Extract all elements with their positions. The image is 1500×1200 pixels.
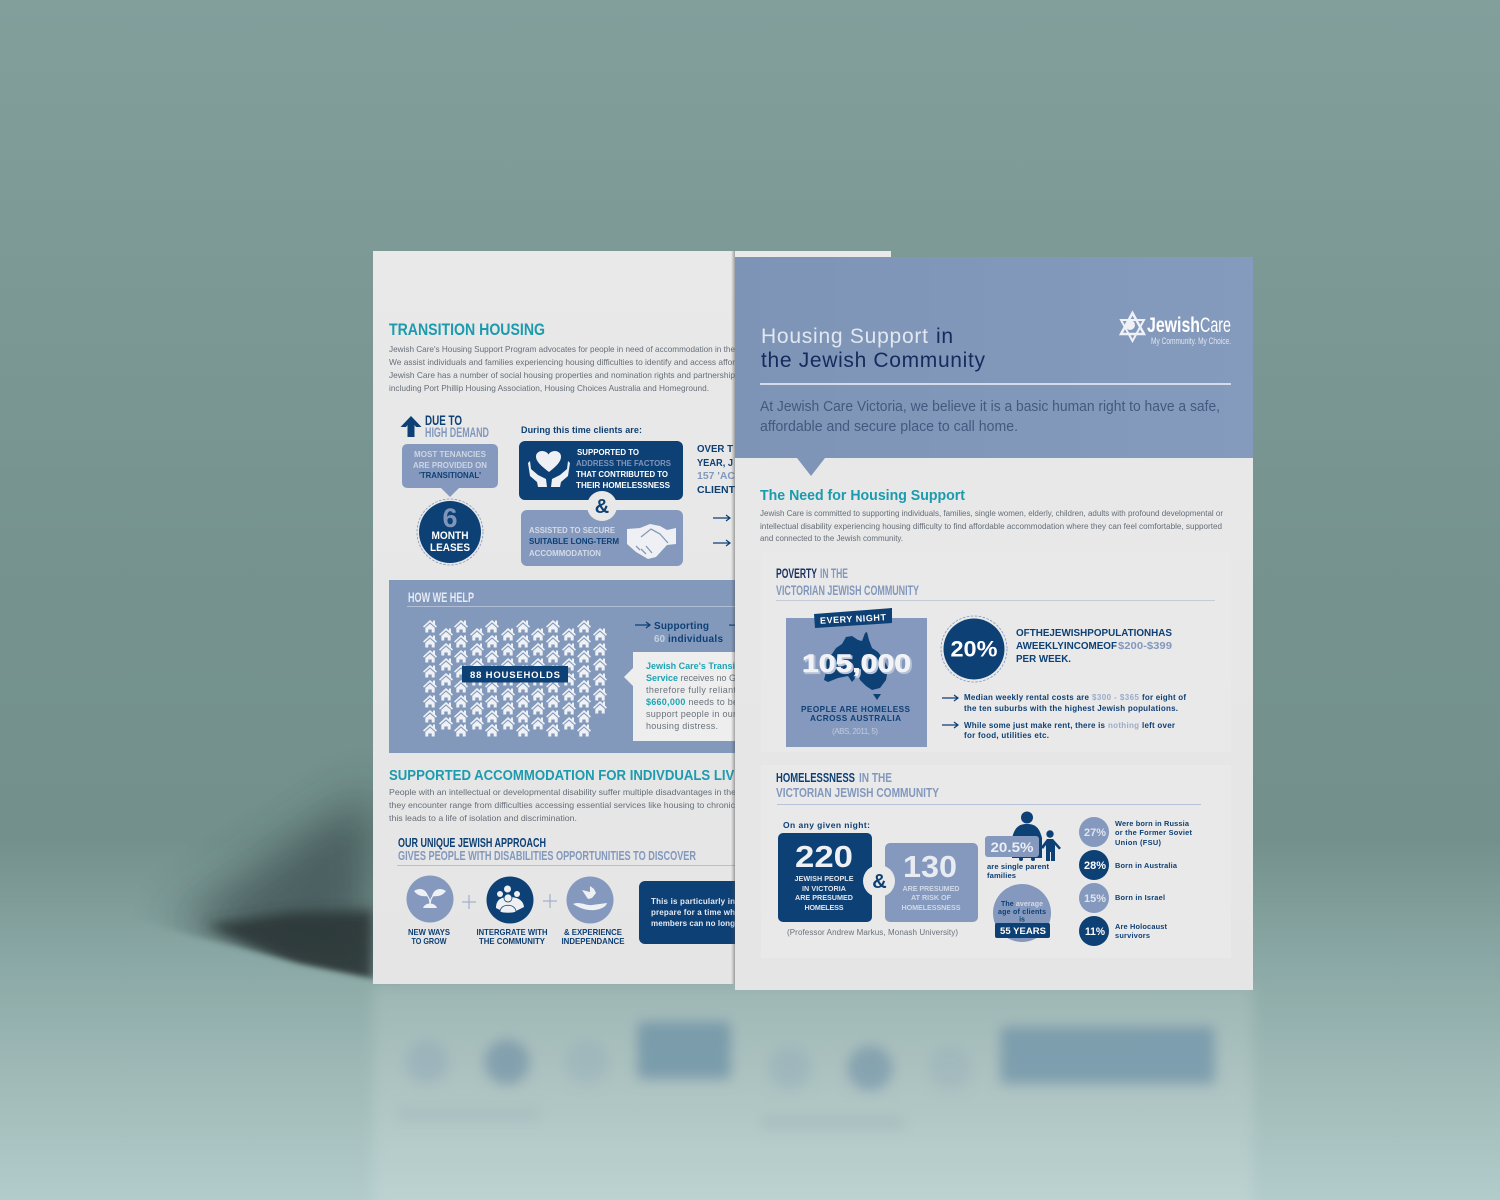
- text: rental costs: Median weekly rental costs are: [964, 693, 1090, 702]
- stat: 15% born in Israel: [1079, 883, 1165, 913]
- text: 20% income statement: [1016, 627, 1172, 665]
- label: 88 households: 88 HOUSEHOLDS: [470, 670, 560, 681]
- text: rental costs: While some just make rent, there is: [964, 721, 1106, 730]
- intro paragraph: [389, 344, 735, 393]
- panel: assisted to secure housing: [521, 510, 683, 566]
- text: over the year (cropped by front sheet): OVER T: [697, 443, 734, 455]
- sheet edge shade: [731, 251, 735, 984]
- stat: 20.5% single parents: families: [987, 871, 1016, 880]
- stat card: 105,000 homeless: [786, 608, 927, 747]
- logo: Jewish Care: Jewish: [1147, 314, 1200, 337]
- badge: 20%: [941, 616, 1007, 682]
- paragraph: need: Jewish Care is committed to supporting individuals, families, single women, elderly, children, adults with profound developmental or: [760, 509, 1223, 518]
- text: rental costs: left over: [1142, 721, 1175, 730]
- stat: 27% born in Russia: [1079, 817, 1193, 847]
- logo: Jewish Care: [1121, 313, 1231, 346]
- stat card: 220: ARE PRESUMED: [795, 893, 853, 902]
- stat: 27% born in Russia: Union (FSU): [1115, 838, 1162, 847]
- banner: every night: [814, 608, 892, 628]
- cast shadow behind the sheets: [170, 790, 373, 985]
- stat card: 130: ARE PRESUMED: [902, 884, 960, 893]
- panel: supported to address factors: SUPPORTED TO: [577, 447, 639, 457]
- heading: due to high demand: DUE TO: [425, 413, 462, 428]
- stat: 15% born in Israel: 15%: [1084, 893, 1106, 905]
- paragraph: need: intellectual disability experiencing housing difficulty to find affordable accommodation where they can feel comfortable, supported: [760, 522, 1222, 531]
- stat card: 220: HOMELESS: [804, 903, 844, 912]
- badge: 6 month leases: MONTH: [432, 530, 469, 542]
- text: rental costs: [964, 693, 1186, 740]
- title: Housing Support: [761, 325, 928, 348]
- badge: average age 55 years: 55 YEARS: [1000, 926, 1046, 937]
- arrows: poverty bullets: [942, 695, 958, 728]
- paragraph: disability disadvantage: [389, 787, 736, 823]
- text: over the year (cropped by front sheet): CLIENT: [697, 484, 736, 496]
- icon: people, integrate with the community: [486, 876, 534, 924]
- header pointer: [797, 458, 825, 476]
- stat: 28% born in Australia: Born in Australia: [1115, 861, 1178, 870]
- panel: assisted to secure housing: ACCOMMODATION: [529, 548, 601, 558]
- callout: particularly important: This is particularly in: [651, 897, 735, 906]
- stat: 11% Holocaust survivors: [1079, 916, 1168, 946]
- stat: 20.5% single parents: are single parent: [987, 862, 1049, 871]
- stat card: 130: AT RISK OF: [911, 893, 952, 902]
- arrows: [713, 515, 730, 546]
- stat card: 220: JEWISH PEOPLE: [794, 874, 854, 883]
- heading: homelessness: IN THE: [859, 770, 892, 785]
- labels: approach steps: & EXPERIENCE: [564, 927, 622, 937]
- heading: the need for housing support: The Need for Housing Support: [760, 487, 965, 504]
- text: 20% income statement: OFTHEJEWISHPOPULATIONHAS: [1016, 627, 1172, 639]
- callout: transition service: $660,000 needs to be: [646, 697, 738, 707]
- paragraph: disability disadvantage: People with an intellectual or developmental disability suffer multiple disadvantages in the: [389, 787, 736, 797]
- panel: supported to address factors: THEIR HOMELESSNESS: [576, 480, 670, 490]
- labels: approach steps: [408, 927, 625, 946]
- title: in: [936, 325, 953, 348]
- panel: supported to address factors: THAT CONTRIBUTED TO: [576, 469, 668, 479]
- logo star: [1121, 313, 1144, 341]
- stat card: 130: 130: [903, 849, 957, 884]
- text: 20% income statement: $200-$399: [1118, 640, 1172, 652]
- badge: 6 month leases: [417, 499, 483, 565]
- panel: assisted to secure housing: ASSISTED TO SECURE: [529, 525, 615, 535]
- callout: particularly important: [639, 881, 749, 944]
- text: over the year (cropped by front sheet): [697, 443, 736, 496]
- ampersand connector: &: [872, 871, 887, 893]
- panel: supported to address factors: [519, 441, 683, 500]
- stat card: 105,000 homeless: (ABS, 2011, 5): [832, 727, 878, 736]
- labels: approach steps: TO GROW: [412, 936, 447, 946]
- plus sign: [462, 895, 476, 909]
- intro paragraph: including Port Phillip Housing Association, Housing Choices Australia and Homeground.: [389, 383, 709, 393]
- callout: transition service: housing distress.: [646, 721, 718, 731]
- stat card: 105,000 homeless: ACROSS AUSTRALIA: [810, 714, 901, 723]
- icon: parent and child: [1012, 812, 1061, 861]
- intro paragraph: We assist individuals and families experiencing housing difficulties to identify and access affor: [389, 357, 735, 367]
- logo: Jewish Care: Care: [1200, 314, 1231, 337]
- heading: our unique jewish approach: [398, 836, 696, 863]
- callout: transition service: [624, 652, 739, 741]
- left sheet: transition housing: [373, 251, 891, 984]
- heading: transition housing: TRANSITION HOUSING: [389, 321, 545, 339]
- callout: transition service: Jewish Care's Transit: [646, 661, 738, 671]
- stat card: 105,000 homeless: PEOPLE ARE HOMELESS: [801, 705, 911, 714]
- panel: how we help: [389, 580, 739, 753]
- badge: average age 55 years: The average: [1001, 901, 1043, 908]
- panel: supported to address factors: ADDRESS THE FACTORS: [576, 458, 671, 468]
- heading: homelessness: VICTORIAN JEWISH COMMUNITY: [776, 785, 939, 800]
- callout: transition service: support people in our: [646, 709, 736, 719]
- badge: average age 55 years: is: [1019, 916, 1025, 924]
- text: rental costs: the ten suburbs with the highest Jewish populations.: [964, 704, 1178, 713]
- heading: our unique jewish approach: OUR UNIQUE JEWISH APPROACH: [398, 836, 546, 850]
- stat: 11% Holocaust survivors: Are Holocaust: [1115, 922, 1168, 931]
- labels: approach steps: NEW WAYS: [408, 927, 450, 937]
- stat: 28% born in Australia: [1079, 850, 1178, 880]
- header band: [735, 257, 1253, 458]
- intro statement: At Jewish Care Victoria, we believe it is a basic human right to have a safe,: [760, 399, 1220, 415]
- heading: due to high demand: HIGH DEMAND: [425, 425, 489, 440]
- heading: how we help: HOW WE HELP: [408, 589, 474, 605]
- text: 20% income statement: PER WEEK.: [1016, 653, 1071, 665]
- ampersand connector: &: [595, 496, 609, 518]
- stat card: 220: IN VICTORIA: [802, 884, 846, 893]
- sheet paper: [373, 251, 891, 984]
- badge: average age 55 years: [993, 884, 1051, 942]
- labels: approach steps: INDEPENDANCE: [562, 936, 625, 946]
- plus sign: [543, 894, 557, 908]
- labels: approach steps: THE COMMUNITY: [479, 936, 545, 946]
- stat card: 220: [778, 833, 872, 922]
- text: over the year (cropped by front sheet): 157 'AC: [697, 470, 735, 482]
- badge: 6 month leases: LEASES: [430, 542, 470, 554]
- text: supporting 60 individuals: [654, 621, 723, 645]
- right sheet: housing support: [735, 257, 1253, 990]
- number: 105,000: 105,000: [804, 652, 912, 680]
- number: 105,000: 105,000: [802, 650, 911, 678]
- callout: transitional tenancies: [402, 444, 498, 497]
- subheading: during this time: During this time clients are:: [521, 425, 642, 435]
- callout: transitional tenancies: MOST TENANCIES: [414, 449, 486, 459]
- stat: 27% born in Russia: or the Former Soviet: [1115, 828, 1193, 837]
- heading: poverty: IN THE: [820, 566, 848, 581]
- banner: every night: EVERY NIGHT: [820, 612, 887, 626]
- arrow: supporting individuals: [635, 622, 650, 628]
- badge: average age 55 years: age of clients: [998, 909, 1046, 916]
- icon: handshake: [627, 524, 676, 559]
- stat card: 220: 220: [795, 839, 853, 874]
- title: the Jewish Community: [761, 349, 986, 372]
- callout: transition service: therefore fully reliant: [646, 685, 736, 695]
- text: rental costs: for eight of: [1142, 693, 1186, 702]
- text: 20% income statement: AWEEKLYINCOMEOF: [1016, 640, 1118, 652]
- panel: homelessness: [761, 765, 1231, 958]
- text: rental costs: nothing: [1108, 721, 1139, 730]
- stat: 28% born in Australia: 28%: [1084, 860, 1106, 872]
- intro statement: [760, 399, 1220, 435]
- stat: 11% Holocaust survivors: survivors: [1115, 931, 1150, 940]
- icon: sprout, new ways to grow: [406, 876, 454, 922]
- stat: 27% born in Russia: Were born in Russia: [1115, 819, 1190, 828]
- text: supporting 60 individuals: 60: [654, 634, 666, 645]
- stat: 11% Holocaust survivors: 11%: [1085, 926, 1105, 938]
- paragraph: disability disadvantage: this leads to a life of isolation and discrimination.: [389, 813, 577, 823]
- heading: poverty: VICTORIAN JEWISH COMMUNITY: [776, 583, 919, 598]
- map: Australia: [822, 632, 888, 700]
- badge: 20%: 20%: [950, 636, 998, 662]
- paragraph: need: [760, 509, 1223, 543]
- intro paragraph: Jewish Care has a number of social housing properties and nomination rights and partnership: [389, 370, 735, 380]
- text: rental costs: for food, utilities etc.: [964, 731, 1049, 740]
- heading: homelessness: [776, 770, 939, 800]
- title: [761, 325, 986, 372]
- subheading: on any given night: On any given night:: [783, 820, 870, 830]
- intro paragraph: Jewish Care's Housing Support Program advocates for people in need of accommodation in the: [389, 344, 735, 354]
- stat: 27% born in Russia: 27%: [1084, 827, 1106, 839]
- icon: up arrow: [400, 416, 422, 437]
- stat card: 130: [885, 843, 978, 922]
- ampersand connector: [587, 491, 617, 521]
- stat card: 130: HOMELESSNESS: [902, 903, 961, 912]
- stat: 20.5% single parents: [985, 836, 1049, 880]
- icon: hands holding heart: [528, 451, 570, 487]
- panel: poverty: [761, 552, 1231, 752]
- callout: transitional tenancies: ARE PROVIDED ON: [413, 460, 487, 470]
- panel: assisted to secure housing: SUITABLE LONG-TERM: [529, 536, 619, 546]
- pictogram: 88 households of houses: [423, 620, 607, 736]
- heading: poverty: [776, 566, 919, 598]
- intro statement: affordable and secure place to call home.: [760, 419, 1018, 435]
- text: supporting 60 individuals: Supporting: [654, 621, 709, 632]
- text: supporting 60 individuals: individuals: [668, 634, 723, 645]
- source note: (Professor Andrew Markus, Monash University): [787, 928, 958, 937]
- arrow stub cropped by front sheet: [729, 624, 736, 626]
- ampersand connector: [863, 865, 895, 897]
- heading: homelessness: HOMELESSNESS: [776, 770, 855, 785]
- label: 88 households: [462, 666, 568, 682]
- callout: transitional tenancies: 'TRANSITIONAL': [419, 470, 481, 480]
- heading: poverty: POVERTY: [776, 566, 817, 581]
- callout: transition service: Service receives no G: [646, 673, 736, 683]
- heading: supported accommodation: SUPPORTED ACCOMMODATION FOR INDIVDUALS LIVI: [389, 768, 738, 784]
- labels: approach steps: INTERGRATE WITH: [476, 927, 548, 937]
- sheet paper: [735, 257, 1253, 990]
- heading: our unique jewish approach: GIVES PEOPLE WITH DISABILITIES OPPORTUNITIES TO DISCOVER: [398, 849, 696, 863]
- badge: 6 month leases: 6: [442, 503, 458, 533]
- paragraph: need: and connected to the Jewish community.: [760, 534, 903, 543]
- callout: particularly important: prepare for a time wh: [651, 908, 735, 917]
- logo: Jewish Care: My Community. My Choice.: [1151, 336, 1231, 346]
- icon: dove over hand, experience independence: [566, 876, 614, 924]
- text: over the year (cropped by front sheet): YEAR, J: [697, 457, 733, 469]
- text: rental costs: $300 - $365: [1092, 693, 1140, 702]
- reflection of the sheets on the floor: [373, 985, 1253, 1200]
- callout: particularly important: members can no long: [651, 919, 735, 928]
- heading: due to high demand: [425, 413, 489, 440]
- paragraph: disability disadvantage: they encounter range from difficulties accessing essential services like housing to chronic: [389, 800, 735, 810]
- stat: 15% born in Israel: Born in Israel: [1115, 893, 1165, 902]
- stat: 20.5% single parents: 20.5%: [990, 839, 1034, 855]
